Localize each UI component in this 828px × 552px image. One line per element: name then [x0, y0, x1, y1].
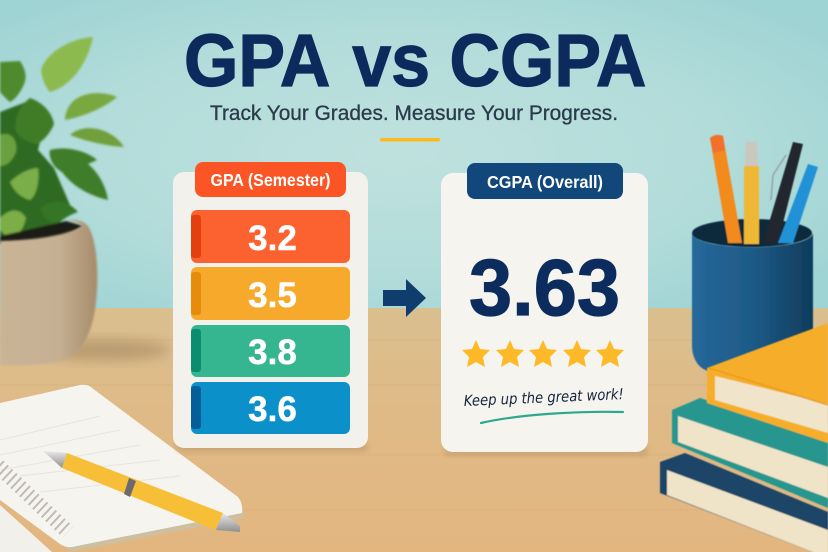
row: 3.5	[191, 267, 350, 320]
title: vs	[352, 20, 449, 102]
blue pen	[778, 164, 818, 243]
card shadows	[176, 442, 648, 456]
title: GPA	[184, 20, 347, 102]
wooden desk	[0, 308, 828, 552]
teal book	[672, 398, 828, 508]
stack of books	[660, 323, 828, 552]
arrow	[383, 279, 426, 317]
notebook	[0, 385, 245, 552]
pot	[0, 220, 97, 366]
row: 3.2: 3.2	[248, 219, 297, 258]
GPA header tab: GPA (Semester)	[210, 170, 330, 190]
background wall	[0, 0, 828, 309]
yellow pen	[744, 142, 759, 244]
cup interior	[692, 219, 812, 247]
five stars	[462, 340, 624, 367]
GPA header tab	[195, 162, 346, 197]
row: 3.2	[191, 210, 350, 263]
spiral binding	[0, 466, 68, 532]
row: 3.6: 3.6	[248, 390, 297, 429]
CGPA header tab	[467, 163, 623, 199]
overall value: 3.63	[469, 243, 620, 332]
subtitle: Track Your Grades. Measure Your Progress.	[210, 102, 618, 125]
orange pen	[710, 135, 742, 243]
yellow book	[707, 323, 828, 443]
panel: CGPA overall card	[441, 163, 648, 452]
encouragement note: Keep up the great work!	[463, 385, 624, 410]
row: 3.8: 3.8	[248, 333, 297, 372]
row: 3.8	[191, 325, 350, 377]
black pen	[763, 142, 803, 243]
potted plant	[0, 37, 170, 366]
green underline	[481, 412, 623, 423]
plant shadow	[40, 339, 170, 361]
panel: GPA semester card	[173, 162, 368, 448]
leaves	[0, 37, 124, 244]
row: 3.6	[191, 382, 350, 434]
pen cup front	[692, 233, 813, 372]
title: CGPA	[450, 20, 646, 102]
navy book	[660, 453, 828, 552]
row: 3.5: 3.5	[248, 276, 297, 315]
yellow pen on notebook	[43, 451, 240, 532]
accent line	[380, 138, 440, 142]
CGPA header tab: CGPA (Overall)	[487, 172, 603, 192]
pen holder with pens	[692, 135, 818, 372]
